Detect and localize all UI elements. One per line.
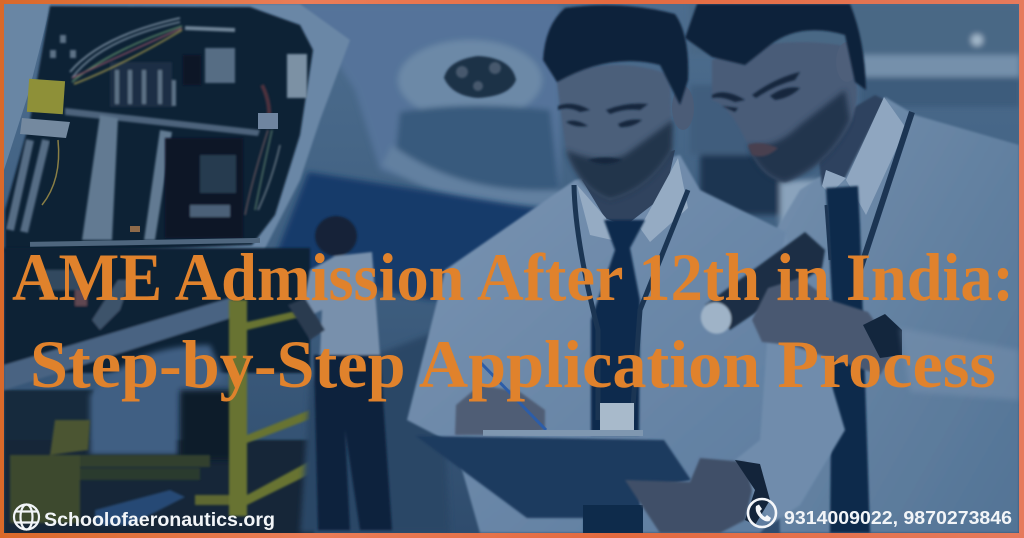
tie below clipboard	[583, 505, 643, 533]
yellow lower bench	[10, 420, 235, 525]
clamps	[20, 118, 70, 138]
yellow stand	[229, 300, 312, 516]
website text: Schoolofaeronautics.org	[44, 510, 275, 531]
neck right	[815, 95, 885, 186]
pen	[480, 362, 546, 430]
left hand	[455, 385, 545, 435]
wire bundle	[70, 18, 235, 84]
ear left	[672, 86, 694, 130]
facial features right	[712, 72, 800, 156]
facial features left	[558, 104, 648, 164]
right wires	[245, 85, 280, 215]
right sleeve left man	[735, 232, 845, 525]
collar right	[846, 97, 906, 215]
collar left	[577, 185, 612, 240]
face right	[712, 42, 857, 182]
floor	[300, 330, 450, 533]
title: Step-by-Step Application Process	[30, 326, 996, 402]
circuit board	[165, 138, 243, 238]
flashlight	[695, 232, 825, 339]
beard left	[566, 120, 673, 200]
engine opening	[444, 56, 516, 98]
ID card	[600, 403, 634, 436]
paper strip	[483, 430, 643, 436]
avionics bay	[5, 6, 313, 254]
insulation bags	[90, 345, 225, 455]
watch right	[863, 314, 902, 358]
right tint cuff	[900, 328, 1019, 400]
cables left	[10, 140, 46, 232]
lanyards left	[574, 185, 688, 420]
shirt right	[770, 97, 1019, 533]
watch left	[735, 460, 770, 525]
title	[12, 239, 1014, 402]
neck left	[582, 150, 675, 226]
holding hand	[625, 458, 752, 533]
blue fuselage stripe	[270, 172, 560, 300]
tie right	[826, 186, 870, 533]
dark equipment	[180, 390, 240, 460]
man right	[685, 4, 1019, 533]
hair right	[685, 4, 866, 90]
icon: globe	[14, 504, 39, 530]
hair left	[543, 5, 688, 105]
icon: phone	[748, 499, 776, 527]
white module	[82, 115, 118, 240]
lanyard right	[860, 112, 912, 270]
upper relays	[50, 35, 307, 136]
face left	[556, 65, 672, 200]
man left	[407, 5, 845, 533]
background worker	[288, 216, 392, 530]
phone footer	[748, 499, 1012, 528]
beard right	[748, 90, 850, 182]
phone numbers: 9314009022, 9870273846	[784, 508, 1012, 528]
website footer	[14, 504, 275, 531]
aircraft engine	[300, 4, 560, 210]
hangar background	[690, 4, 1020, 230]
white fuselage panel	[50, 4, 350, 249]
yellow box	[27, 79, 65, 114]
hand right	[752, 278, 895, 375]
lower left machinery	[4, 248, 314, 535]
ear right	[842, 42, 850, 60]
left fuselage strip	[4, 4, 51, 170]
tie left	[591, 220, 645, 435]
shirt left	[406, 154, 777, 533]
clipboard	[416, 436, 691, 533]
